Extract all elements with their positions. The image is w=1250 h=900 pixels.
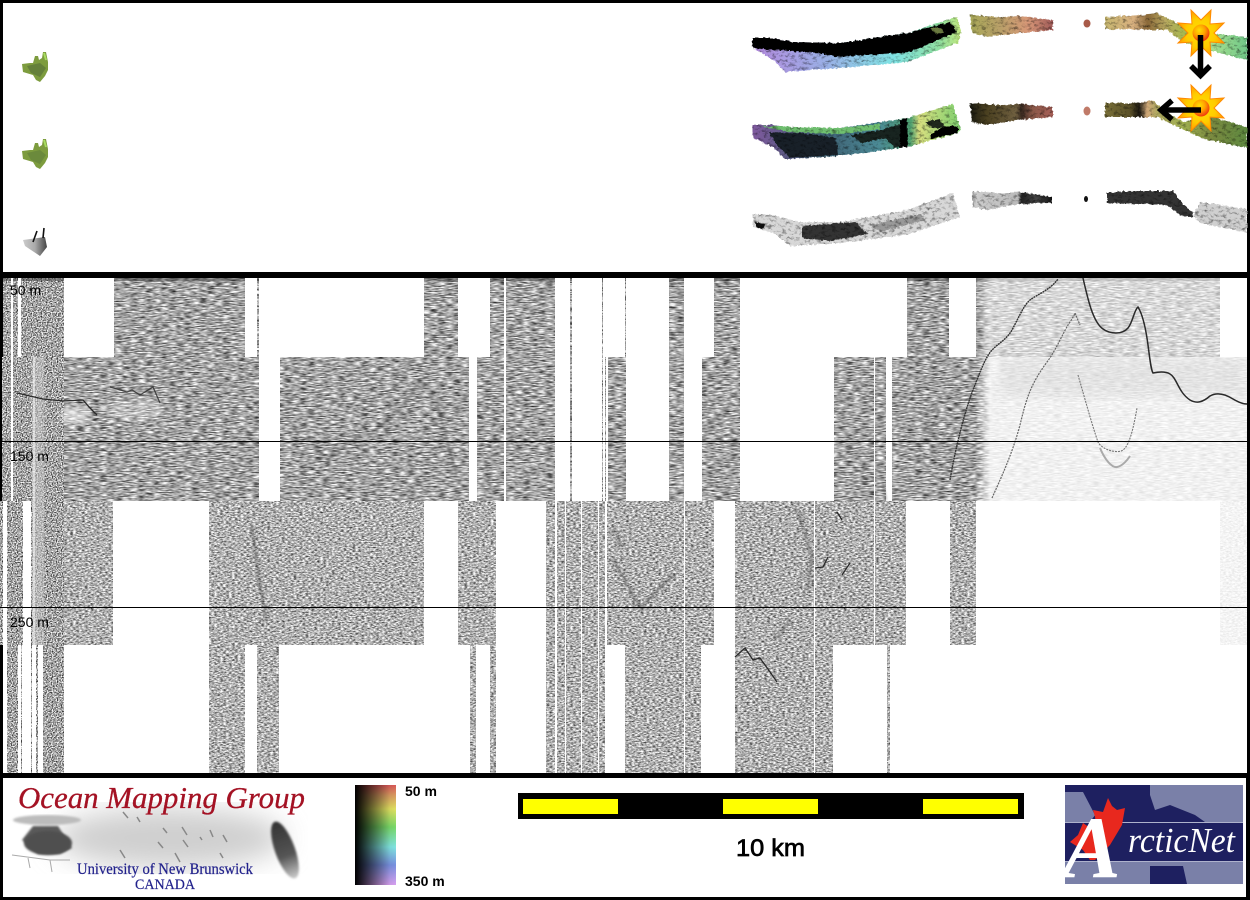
trace: west seabed reflector xyxy=(17,387,160,415)
map: small survey patch, backscatter xyxy=(23,228,47,256)
label: colour bar bottom: 350 m xyxy=(405,873,445,889)
logo: Ocean Mapping Group: Ocean Mapping Group xyxy=(18,780,305,815)
scale bar xyxy=(518,793,1024,862)
map: small survey patch, colour sunlit west xyxy=(22,139,48,169)
logo: Ocean Mapping Group xyxy=(12,780,305,893)
icon: sun, upper xyxy=(1178,10,1224,56)
label: colour bar top: 50 m xyxy=(405,783,437,799)
map: small dot, backscatter xyxy=(1084,196,1088,202)
noise swaths xyxy=(0,278,1247,773)
legend: depth colour bar xyxy=(355,783,445,889)
logo: ArcticNet xyxy=(1057,785,1243,897)
map: central swath, backscatter xyxy=(972,191,1052,210)
map: small dot, colour sunlit north xyxy=(1084,20,1090,28)
map: central swath, colour sunlit west xyxy=(970,103,1053,125)
map: small survey patch, colour sunlit north xyxy=(22,52,48,82)
map: central swath, colour sunlit north xyxy=(970,15,1053,37)
label: 250 m: 250 m xyxy=(10,614,49,630)
wordmark: rcticNet xyxy=(1128,821,1236,860)
arrow: sun direction north xyxy=(1191,35,1210,76)
wordmark xyxy=(1057,800,1236,897)
gridline: 150 m xyxy=(0,441,1247,442)
trace: central seabed reflector xyxy=(252,382,940,640)
arrow: sun direction west xyxy=(1161,100,1201,120)
map: west swath, colour sunlit north xyxy=(752,17,961,72)
map: west swath, backscatter xyxy=(753,193,960,246)
map: small dot, colour sunlit west xyxy=(1084,106,1090,116)
logo: Ocean Mapping Group: CANADA xyxy=(135,877,195,893)
label: 50 m: 50 m xyxy=(10,282,41,298)
map: east swath, colour sunlit north xyxy=(1105,13,1247,60)
map: west swath, colour sunlit west xyxy=(752,104,961,159)
gridline: 250 m xyxy=(0,607,1247,608)
label: 150 m: 150 m xyxy=(10,448,49,464)
wordmark: A xyxy=(1057,800,1121,897)
trace: eastern sidewall and seabed reflectors xyxy=(950,278,1247,498)
panel: footer xyxy=(3,778,1246,897)
panel: echogram xyxy=(0,278,1250,773)
icon: sun, lower xyxy=(1178,85,1224,131)
panel: bathymetry maps xyxy=(3,3,1247,272)
trace: deep sharp reflectors xyxy=(735,512,850,682)
map: east swath, colour sunlit west xyxy=(1105,100,1247,148)
logo: Ocean Mapping Group: University of New Brunswick xyxy=(77,861,253,878)
icon: maple leaf xyxy=(1070,798,1125,860)
label: scale length: 10 km xyxy=(736,835,805,862)
map: east swath, backscatter xyxy=(1107,191,1247,233)
